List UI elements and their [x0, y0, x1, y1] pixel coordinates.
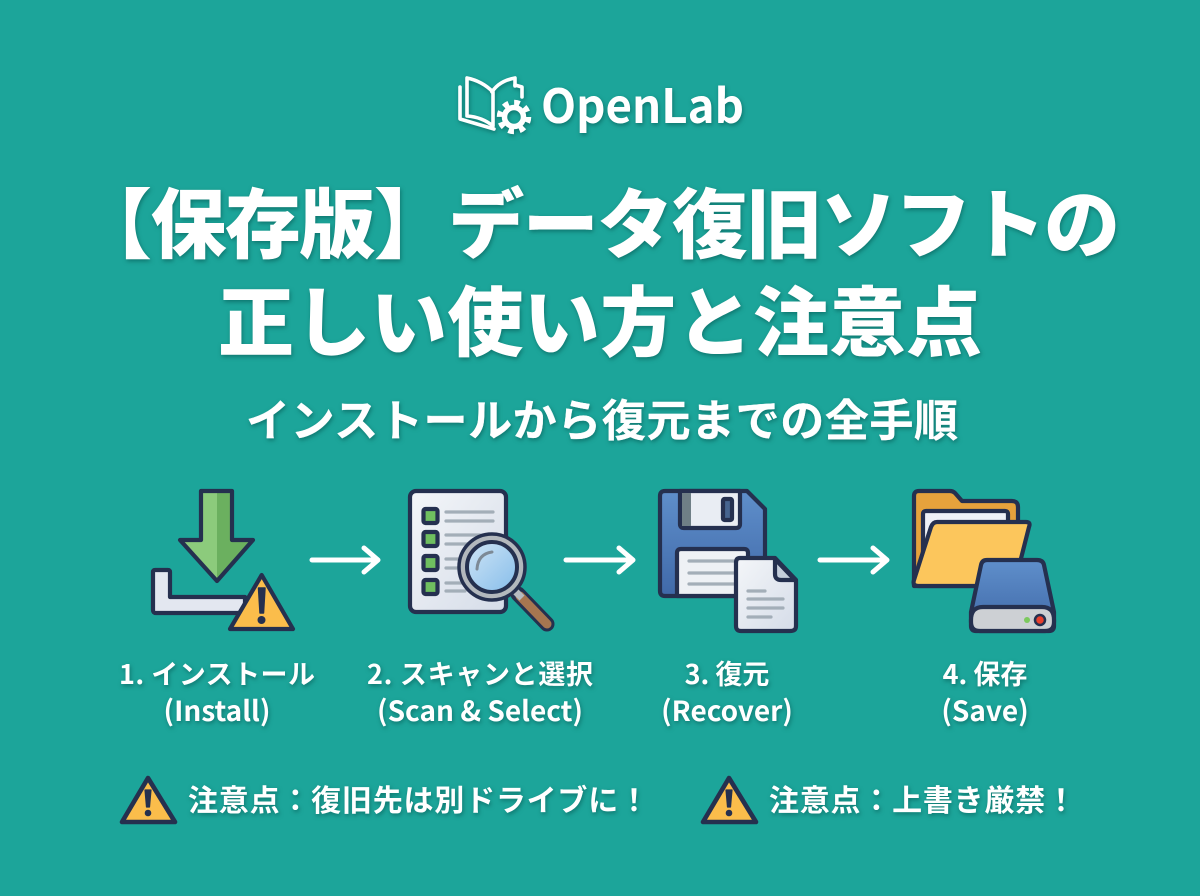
- icon: floppy disk with file: [660, 491, 796, 631]
- step label 4: 4. 保存: [943, 653, 1027, 692]
- icon: folder with drive: [914, 491, 1054, 631]
- icon: book and gear: [460, 78, 528, 131]
- title line 2: 正しい使い方と注意点: [218, 262, 982, 372]
- step label 3 english: (Recover): [661, 690, 793, 730]
- step label 1 english: (Install): [164, 690, 270, 730]
- arrow 1: [312, 548, 378, 572]
- step label 3: 3. 復元: [685, 653, 769, 692]
- icon: download with warning: [153, 491, 293, 629]
- icon: warning triangle: [122, 778, 175, 822]
- icon: warning triangle: [703, 778, 756, 822]
- step label 2: 2. スキャンと選択: [367, 653, 593, 692]
- logo wordmark: OpenLab: [541, 68, 744, 137]
- step 2: scan and select: [367, 491, 593, 730]
- step 4: save: [914, 491, 1054, 730]
- title: [76, 164, 1120, 372]
- title line 1: 【保存版】データ復旧ソフトの: [76, 164, 1120, 274]
- step 1: install: [119, 491, 315, 730]
- arrow 2: [566, 548, 633, 572]
- step label 4 english: (Save): [941, 690, 1029, 730]
- caution text 2: 注意点：上書き厳禁！: [769, 776, 1076, 820]
- logo: OpenLab: [460, 68, 744, 137]
- caution 2: [703, 776, 1076, 822]
- step label 2 english: (Scan & Select): [377, 690, 583, 730]
- caution 1: [122, 776, 649, 822]
- icon: document with magnifier: [410, 491, 547, 624]
- step 3: recover: [660, 491, 796, 730]
- step label 1: 1. インストール: [119, 653, 315, 692]
- subtitle: インストールから復元までの全手順: [246, 385, 958, 449]
- caution text 1: 注意点：復旧先は別ドライブに！: [188, 776, 649, 820]
- arrow 3: [820, 548, 887, 572]
